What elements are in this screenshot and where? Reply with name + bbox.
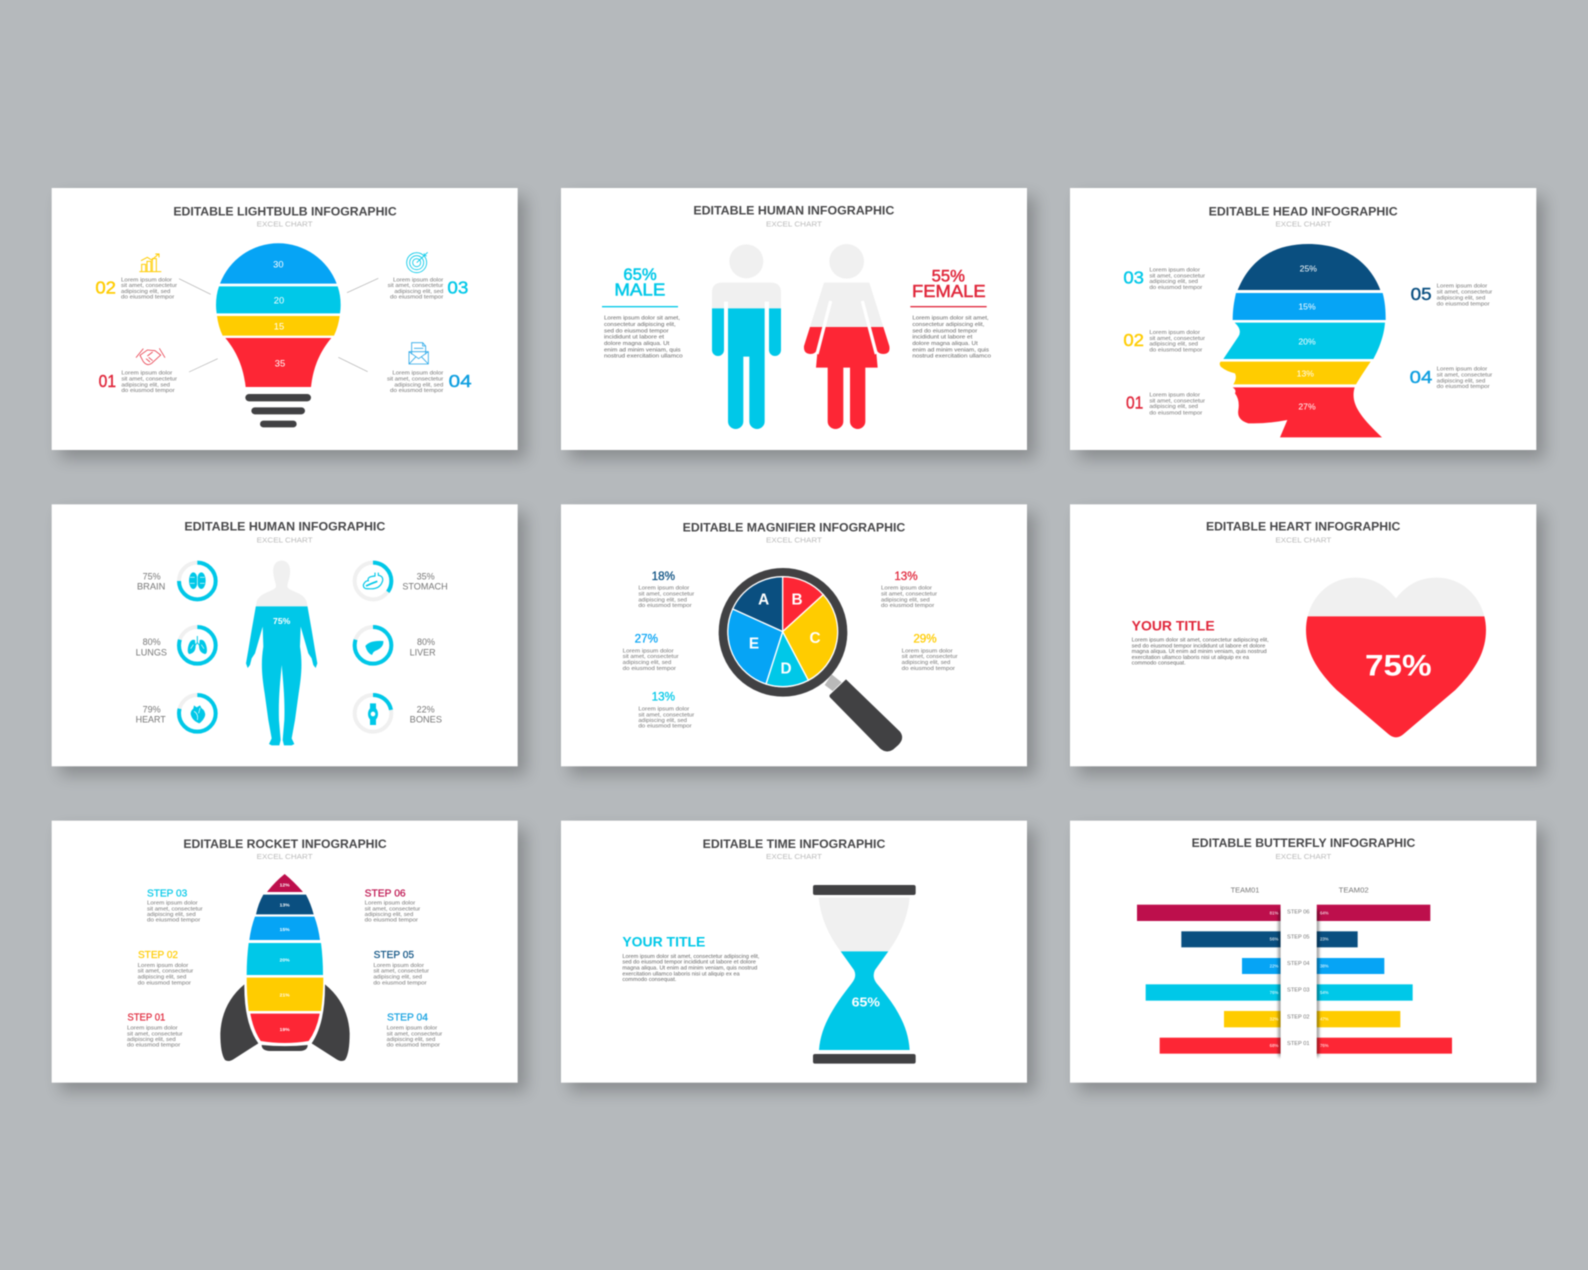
step 03: adipiscing elit, sed xyxy=(147,912,196,918)
item 01: Lorem ipsum dolor xyxy=(121,371,173,377)
butterfly bar chart: 68% xyxy=(1270,1043,1278,1048)
item 01: 01 xyxy=(99,371,116,391)
pie chart: A xyxy=(758,591,769,608)
item 02: Lorem ipsum dolor xyxy=(121,277,172,283)
male stats: nostrud exercitation ullamco xyxy=(604,354,683,360)
lightbulb chart: 20 xyxy=(274,296,284,306)
bones label: 22% xyxy=(417,704,435,714)
item 05: 05 xyxy=(1411,284,1432,304)
item 02: sit amet, consectetur xyxy=(1149,336,1205,342)
stomach label: 35% xyxy=(417,571,435,581)
stat: D 13%: do eiusmod tempor xyxy=(638,724,692,730)
step 01: do eiusmod tempor xyxy=(127,1043,181,1049)
subtitle: EXCEL CHART xyxy=(766,536,822,545)
step 02: do eiusmod tempor xyxy=(138,980,191,986)
pie chart: C xyxy=(809,630,821,647)
head chart: 20% xyxy=(1298,336,1316,346)
step 05 xyxy=(373,950,429,986)
step 06: sit amet, consectetur xyxy=(365,906,421,912)
female stats: Lorem ipsum dolor sit amet, xyxy=(912,316,989,322)
stat: A 18%: adipiscing elit, sed xyxy=(638,597,687,603)
item 01: adipiscing elit, sed xyxy=(121,382,170,388)
male figure xyxy=(712,244,781,429)
step 06: do eiusmod tempor xyxy=(365,918,418,924)
step 04: Lorem ipsum dolor xyxy=(387,1025,438,1031)
panel: human body organs infographic xyxy=(52,504,526,775)
item 03: 03 xyxy=(1123,268,1144,288)
step 05: STEP 05 xyxy=(374,950,414,961)
male stats: Lorem ipsum dolor sit amet, xyxy=(604,316,681,322)
item 01 xyxy=(99,371,177,394)
butterfly bar chart: 76% xyxy=(1270,990,1278,995)
step 01 xyxy=(127,1012,183,1049)
stat: C 29%: adipiscing elit, sed xyxy=(902,660,950,666)
female stats: FEMALE xyxy=(912,281,986,301)
step 06: Lorem ipsum dolor xyxy=(365,900,416,906)
head chart: 25% xyxy=(1300,263,1317,273)
step 02: adipiscing elit, sed xyxy=(138,975,186,981)
lungs label xyxy=(136,637,167,657)
item 03: do eiusmod tempor xyxy=(390,295,444,301)
step 05: do eiusmod tempor xyxy=(373,980,427,986)
pie chart xyxy=(728,577,838,687)
male stats: dolore magna aliqua. Ut xyxy=(604,341,670,347)
heart label: 79% xyxy=(143,704,161,714)
step 01: sit amet, consectetur xyxy=(127,1031,183,1037)
step 04: adipiscing elit, sed xyxy=(387,1037,435,1043)
step 04: sit amet, consectetur xyxy=(387,1031,443,1037)
item 03 xyxy=(1123,267,1205,291)
butterfly bar chart: 54% xyxy=(1320,990,1329,995)
stat: A 18%: Lorem ipsum dolor xyxy=(638,586,690,592)
female figure xyxy=(804,244,890,429)
step 04 xyxy=(387,1012,443,1049)
stomach label xyxy=(402,571,448,592)
butterfly bar chart: STEP 01 xyxy=(1287,1041,1310,1047)
butterfly bar chart: STEP 06 xyxy=(1287,910,1310,916)
lungs label: 80% xyxy=(143,637,161,647)
item 01: 01 xyxy=(1126,393,1143,413)
rocket chart: 12% xyxy=(280,882,290,888)
butterfly bar chart: 32% xyxy=(1270,1017,1278,1022)
step 03: sit amet, consectetur xyxy=(147,906,203,912)
rocket chart: 13% xyxy=(280,902,290,908)
stat: E 27%: adipiscing elit, sed xyxy=(623,660,671,666)
butterfly bar chart: 47% xyxy=(1320,1017,1329,1022)
butterfly bar chart: 76% xyxy=(1320,1043,1329,1048)
step 04: STEP 04 xyxy=(387,1012,428,1023)
butterfly bar chart: STEP 03 xyxy=(1287,988,1310,994)
female stats: consectetur adipiscing elit, xyxy=(912,322,985,328)
pie chart: D xyxy=(780,660,792,677)
body silhouette xyxy=(246,561,317,745)
title: EDITABLE HUMAN INFOGRAPHIC xyxy=(693,203,894,217)
item 02: do eiusmod tempor xyxy=(1149,348,1203,354)
text block: sed do eiusmod tempor incididunt ut labore et dolore xyxy=(1132,643,1265,649)
item 04: adipiscing elit, sed xyxy=(1437,378,1485,384)
heart gauge xyxy=(179,695,216,732)
title: EDITABLE HEAD INFOGRAPHIC xyxy=(1209,204,1398,218)
step 03 xyxy=(147,888,203,924)
subtitle: EXCEL CHART xyxy=(766,219,822,228)
step 05: sit amet, consectetur xyxy=(373,969,429,975)
title: EDITABLE HUMAN INFOGRAPHIC xyxy=(184,520,385,534)
male stats: incididunt ut labore et xyxy=(604,335,665,341)
male stats: MALE xyxy=(614,280,665,300)
subtitle: EXCEL CHART xyxy=(1275,852,1332,861)
lightbulb chart: 30 xyxy=(273,260,284,270)
item 01: sit amet, consectetur xyxy=(121,376,177,382)
team 01 header: TEAM01 xyxy=(1231,886,1259,895)
stat: B 13% xyxy=(881,570,937,609)
item 04: 04 xyxy=(449,371,472,391)
stomach label: STOMACH xyxy=(402,582,448,592)
stat: E 27%: do eiusmod tempor xyxy=(623,666,676,672)
brain label xyxy=(137,571,165,592)
rocket chart: 15% xyxy=(280,927,290,933)
text block xyxy=(1132,618,1269,667)
step 06: adipiscing elit, sed xyxy=(365,912,413,918)
title: EDITABLE ROCKET INFOGRAPHIC xyxy=(183,837,387,851)
item 02: Lorem ipsum dolor xyxy=(1149,330,1200,336)
title: EDITABLE BUTTERFLY INFOGRAPHIC xyxy=(1192,836,1415,850)
magnifier icon xyxy=(723,573,902,751)
subtitle: EXCEL CHART xyxy=(766,852,822,861)
icon: envelope xyxy=(409,343,428,364)
panel: human male female infographic xyxy=(561,188,1035,459)
text block: sed do eiusmod tempor incididunt ut labore et dolore xyxy=(622,960,756,966)
step 06: STEP 06 xyxy=(365,888,406,899)
stat: C 29% xyxy=(902,632,958,672)
head chart: 15% xyxy=(1298,301,1316,311)
item 04: sit amet, consectetur xyxy=(1437,372,1493,378)
item 02 xyxy=(1123,330,1205,354)
item 04 xyxy=(387,371,472,394)
stat: D 13% xyxy=(638,691,695,730)
liver label: LIVER xyxy=(410,647,436,657)
item 02 xyxy=(95,277,177,301)
item 02: adipiscing elit, sed xyxy=(1149,342,1198,348)
item 01: Lorem ipsum dolor xyxy=(1149,393,1200,399)
bones gauge xyxy=(355,695,391,732)
title: EDITABLE HEART INFOGRAPHIC xyxy=(1206,520,1400,534)
male stats: sed do eiusmod tempor xyxy=(604,328,669,334)
stat: B 13%: 13% xyxy=(894,570,918,583)
stat: C 29%: sit amet, consectetur xyxy=(902,654,958,660)
butterfly bar chart: 64% xyxy=(1320,910,1329,915)
item 05: sit amet, consectetur xyxy=(1437,290,1493,296)
pie chart: B xyxy=(791,591,803,608)
item 03: sit amet, consectetur xyxy=(388,283,444,289)
stat: A 18%: 18% xyxy=(652,570,675,583)
step 02: STEP 02 xyxy=(138,950,178,961)
stat: C 29%: do eiusmod tempor xyxy=(902,666,955,672)
female stats: enim ad minim veniam, quis xyxy=(912,347,989,353)
butterfly bar chart: 56% xyxy=(1270,937,1278,942)
stat: D 13%: Lorem ipsum dolor xyxy=(638,706,690,712)
stat: E 27%: 27% xyxy=(635,632,658,645)
bones label: BONES xyxy=(410,714,442,724)
step 05: adipiscing elit, sed xyxy=(373,975,422,981)
item 04: do eiusmod tempor xyxy=(390,388,444,394)
step 03: Lorem ipsum dolor xyxy=(147,900,198,906)
text block: YOUR TITLE xyxy=(622,935,705,950)
text block: magna aliqua. Ut enim ad minim veniam, quis nostrud xyxy=(622,966,757,972)
brain gauge xyxy=(179,563,216,599)
stat: B 13%: sit amet, consectetur xyxy=(881,592,937,598)
female stats: 55% xyxy=(932,266,965,285)
female stats: incididunt ut labore et xyxy=(912,335,973,341)
title: EDITABLE MAGNIFIER INFOGRAPHIC xyxy=(683,521,905,535)
brain label: 75% xyxy=(143,571,161,581)
bones label xyxy=(410,704,442,724)
item 03: Lorem ipsum dolor xyxy=(1149,267,1200,273)
item 01: do eiusmod tempor xyxy=(121,388,175,394)
subtitle: EXCEL CHART xyxy=(1275,536,1332,545)
rocket chart: 20% xyxy=(280,957,290,963)
stomach gauge xyxy=(355,563,391,599)
liver label: 80% xyxy=(417,637,435,647)
body silhouette: 75% xyxy=(273,616,291,626)
stat: B 13%: Lorem ipsum dolor xyxy=(881,586,932,592)
male stats xyxy=(602,265,683,360)
item 03: 03 xyxy=(447,278,468,298)
item 04: 04 xyxy=(1410,367,1432,387)
text block: YOUR TITLE xyxy=(1132,618,1215,633)
stat: E 27%: sit amet, consectetur xyxy=(623,654,679,660)
male stats: enim ad minim veniam, quis xyxy=(604,347,681,353)
panel: heart infographic xyxy=(1070,504,1544,775)
heart chart: 75% xyxy=(1365,649,1432,682)
heart label: HEART xyxy=(136,714,166,724)
brain label: BRAIN xyxy=(137,582,165,592)
head chart: 13% xyxy=(1297,369,1314,379)
subtitle: EXCEL CHART xyxy=(1275,219,1332,228)
heart label xyxy=(136,704,166,724)
panel: head infographic xyxy=(1070,188,1544,459)
step 03: STEP 03 xyxy=(147,888,188,899)
text block: exercitation ullamco laboris nisi ut aliquip ex ea xyxy=(1132,655,1250,661)
step 04: do eiusmod tempor xyxy=(387,1043,440,1049)
step 01: Lorem ipsum dolor xyxy=(127,1025,178,1031)
item 04: do eiusmod tempor xyxy=(1437,384,1490,390)
item 05: Lorem ipsum dolor xyxy=(1437,284,1488,290)
lungs gauge xyxy=(179,627,216,664)
heart chart xyxy=(1306,578,1486,737)
rocket chart: 19% xyxy=(280,1027,290,1033)
step 02: sit amet, consectetur xyxy=(138,969,194,975)
item 04: Lorem ipsum dolor xyxy=(1437,367,1488,373)
item 03: adipiscing elit, sed xyxy=(394,289,443,295)
rocket chart xyxy=(220,874,350,1061)
stat: A 18% xyxy=(638,570,695,609)
text block: commodo consequat. xyxy=(1132,661,1186,667)
butterfly bar chart: STEP 05 xyxy=(1287,935,1310,941)
panel: time hourglass infographic xyxy=(561,821,1035,1091)
item 02: 02 xyxy=(95,278,116,298)
item 04: sit amet, consectetur xyxy=(387,376,444,382)
item 04: Lorem ipsum dolor xyxy=(392,371,444,377)
item 03: Lorem ipsum dolor xyxy=(393,277,444,283)
item 02: adipiscing elit, sed xyxy=(121,289,170,295)
text block: magna aliqua. Ut enim ad minim veniam, quis nostrud xyxy=(1132,649,1267,655)
item 03 xyxy=(388,277,468,301)
liver label xyxy=(410,637,436,657)
subtitle: EXCEL CHART xyxy=(257,852,313,861)
step 06 xyxy=(365,888,421,924)
head chart xyxy=(1220,244,1386,437)
panel: rocket infographic xyxy=(52,821,526,1091)
lightbulb chart xyxy=(216,243,341,427)
item 02: do eiusmod tempor xyxy=(121,295,175,301)
panel: magnifier infographic xyxy=(561,504,1035,775)
rocket chart: 21% xyxy=(280,992,290,998)
item 01: do eiusmod tempor xyxy=(1149,410,1203,416)
text block xyxy=(622,935,760,983)
text block: commodo consequat. xyxy=(622,977,677,983)
panel: butterfly infographic xyxy=(1070,821,1544,1091)
stat: B 13%: do eiusmod tempor xyxy=(881,603,935,609)
stat: E 27%: Lorem ipsum dolor xyxy=(623,648,674,654)
step 01: adipiscing elit, sed xyxy=(127,1037,176,1043)
female stats: dolore magna aliqua. Ut xyxy=(912,341,978,347)
text block: Lorem ipsum dolor sit amet, consectetur adipiscing elit, xyxy=(1132,638,1269,644)
stat: A 18%: do eiusmod tempor xyxy=(638,603,692,609)
subtitle: EXCEL CHART xyxy=(257,536,313,545)
panel: lightbulb infographic xyxy=(52,188,526,459)
butterfly bar chart: 38% xyxy=(1320,963,1329,968)
male stats: 65% xyxy=(623,265,657,284)
item 05: do eiusmod tempor xyxy=(1437,301,1490,307)
connector lines xyxy=(179,278,378,372)
hourglass chart: 65% xyxy=(852,995,880,1010)
hourglass chart xyxy=(813,885,916,1064)
stat: C 29%: Lorem ipsum dolor xyxy=(902,648,953,654)
female stats: sed do eiusmod tempor xyxy=(912,328,978,334)
female stats: nostrud exercitation ullamco xyxy=(912,354,991,360)
title: EDITABLE LIGHTBULB INFOGRAPHIC xyxy=(173,204,397,218)
step 02: Lorem ipsum dolor xyxy=(138,963,189,969)
item 05: adipiscing elit, sed xyxy=(1437,295,1485,301)
item 01: adipiscing elit, sed xyxy=(1149,404,1198,410)
stat: D 13%: 13% xyxy=(652,691,675,704)
butterfly bar chart: STEP 02 xyxy=(1287,1014,1310,1020)
stat: E 27% xyxy=(623,632,679,672)
item 03: sit amet, consectetur xyxy=(1149,273,1205,279)
item 01: sit amet, consectetur xyxy=(1149,398,1205,404)
item 03: do eiusmod tempor xyxy=(1149,285,1203,291)
subtitle: EXCEL CHART xyxy=(257,219,313,228)
lungs label: LUNGS xyxy=(136,647,167,657)
item 04: adipiscing elit, sed xyxy=(394,382,443,388)
title: EDITABLE TIME INFOGRAPHIC xyxy=(703,837,885,851)
male stats: consectetur adipiscing elit, xyxy=(604,322,676,328)
stat: C 29%: 29% xyxy=(913,632,937,645)
butterfly bar chart: 23% xyxy=(1320,937,1329,942)
stat: D 13%: sit amet, consectetur xyxy=(638,712,695,718)
icon: target xyxy=(407,252,428,273)
icon: handshake xyxy=(136,348,165,365)
stat: B 13%: adipiscing elit, sed xyxy=(881,597,930,603)
item 03: adipiscing elit, sed xyxy=(1149,279,1198,285)
butterfly bar chart: 81% xyxy=(1270,910,1278,915)
step 01: STEP 01 xyxy=(127,1012,166,1023)
text block: exercitation ullamco laboris nisi ut aliquip ex ea xyxy=(622,971,741,977)
item 02: 02 xyxy=(1123,330,1144,350)
item 02: sit amet, consectetur xyxy=(121,283,177,289)
lightbulb chart: 15 xyxy=(274,321,284,331)
female stats xyxy=(910,266,991,360)
butterfly bar chart: STEP 04 xyxy=(1287,961,1310,967)
pie chart: E xyxy=(749,636,759,653)
item 05 xyxy=(1411,284,1493,307)
team 02 header: TEAM02 xyxy=(1339,886,1369,895)
step 02 xyxy=(138,950,194,986)
stat: A 18%: sit amet, consectetur xyxy=(638,592,695,598)
step 03: do eiusmod tempor xyxy=(147,918,201,924)
item 04 xyxy=(1410,367,1493,390)
butterfly bar chart: 22% xyxy=(1270,963,1278,968)
item 01 xyxy=(1126,393,1205,416)
butterfly bar chart xyxy=(1137,890,1452,1070)
step 05: Lorem ipsum dolor xyxy=(373,963,424,969)
liver gauge xyxy=(355,627,391,664)
stat: D 13%: adipiscing elit, sed xyxy=(638,718,687,724)
text block: Lorem ipsum dolor sit amet, consectetur adipiscing elit, xyxy=(622,954,760,960)
lightbulb chart: 35 xyxy=(275,359,285,369)
icon: growth chart xyxy=(139,254,161,272)
head chart: 27% xyxy=(1298,401,1316,411)
